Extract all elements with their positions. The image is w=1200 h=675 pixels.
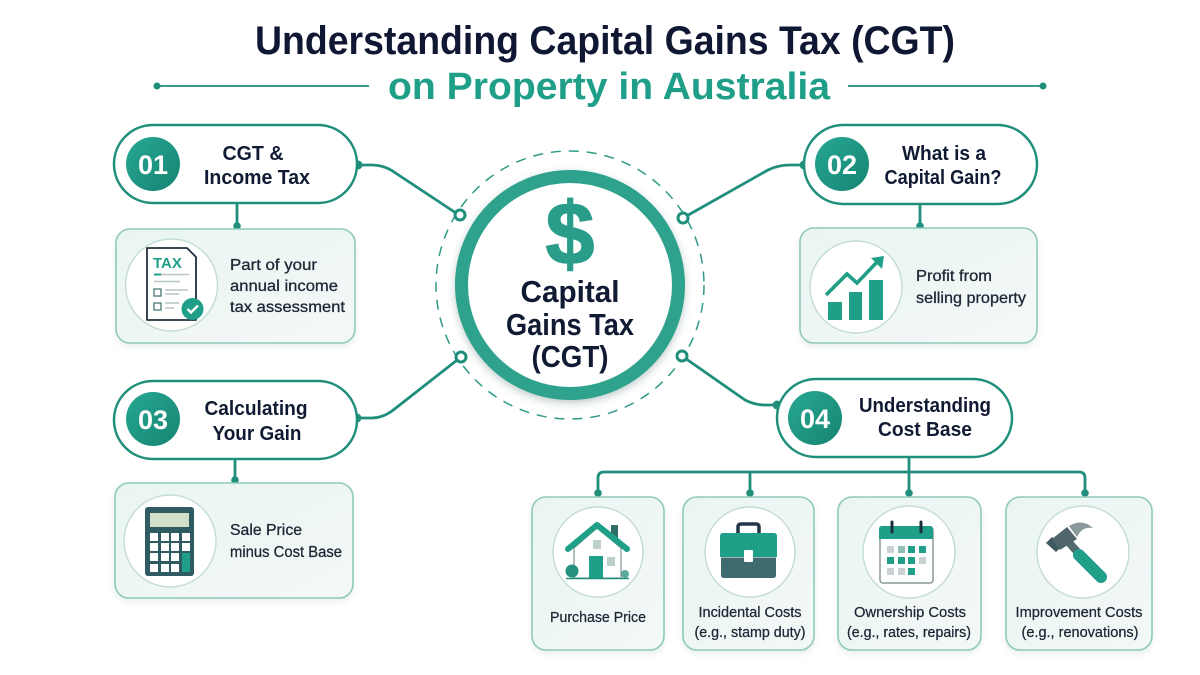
panel: 03 detail	[115, 483, 353, 598]
icon: tax document	[147, 248, 204, 320]
central hub: Capital Gains Tax	[436, 151, 704, 419]
panel: 01 detail: Part of your	[230, 257, 318, 274]
panel: 04 heading: 04	[800, 404, 830, 434]
panel: 02 detail: Profit from	[916, 268, 992, 285]
panel: improvement costs	[1006, 497, 1152, 650]
panel: 01 detail: tax assessment	[230, 299, 346, 316]
panel: 01 heading: CGT &	[222, 143, 284, 165]
panel: 03 heading: 03	[138, 405, 168, 435]
panel: 03 detail: minus Cost Base	[230, 544, 342, 561]
subtitle: on Property in Australia	[388, 66, 831, 108]
panel: 03 detail: Sale Price	[230, 522, 302, 539]
icon: hammer	[1046, 522, 1101, 577]
panel: 02 detail	[800, 228, 1037, 343]
panel: improvement costs: Improvement Costs	[1016, 605, 1142, 621]
hub label	[506, 274, 635, 374]
panel: incidental costs	[683, 497, 814, 650]
panel: 01 heading	[114, 125, 357, 203]
panel: purchase price: Purchase Price	[550, 610, 646, 626]
panel: 02 heading	[804, 125, 1037, 204]
icon: tax document: TAX	[153, 255, 182, 272]
panel: 02 heading: Capital Gain?	[884, 167, 1002, 189]
icon: briefcase	[720, 524, 777, 578]
icon: calculator	[145, 507, 194, 576]
hub label: Gains Tax	[506, 307, 635, 342]
panel: 03 heading: Calculating	[204, 398, 308, 420]
hub label: (CGT)	[532, 339, 608, 374]
panel: 04 heading	[777, 379, 1012, 457]
panel: ownership costs	[838, 497, 981, 650]
icon: calendar	[879, 522, 933, 583]
panel: 03 heading: Your Gain	[212, 423, 302, 445]
icon: dollar sign: $	[546, 184, 594, 283]
icon: growth chart	[826, 256, 884, 320]
panel: 02 heading: What is a	[902, 143, 987, 165]
panel: purchase price	[532, 497, 664, 650]
panel: incidental costs: (e.g., stamp duty)	[694, 625, 806, 641]
icon: house	[566, 525, 629, 578]
panel: incidental costs: Incidental Costs	[698, 605, 802, 621]
hub label: Capital	[520, 274, 620, 309]
title: Understanding Capital Gains Tax (CGT)	[255, 19, 955, 63]
panel: 04 heading: Cost Base	[878, 419, 972, 441]
title	[154, 19, 1046, 108]
connectors	[231, 160, 1089, 497]
panel: improvement costs: (e.g., renovations)	[1022, 625, 1138, 641]
panel: 01 detail	[116, 229, 355, 343]
panel: 01 detail: annual income	[230, 278, 338, 295]
panel: ownership costs: Ownership Costs	[854, 605, 966, 621]
panel: 03 heading	[114, 381, 357, 459]
panel: 04 heading: Understanding	[859, 395, 991, 417]
panel: 01 heading: Income Tax	[204, 167, 310, 189]
panel: 01 heading: 01	[138, 150, 168, 180]
panel: 02 detail: selling property	[916, 290, 1026, 307]
panel: 02 heading: 02	[827, 150, 857, 180]
panel: ownership costs: (e.g., rates, repairs)	[847, 625, 971, 641]
